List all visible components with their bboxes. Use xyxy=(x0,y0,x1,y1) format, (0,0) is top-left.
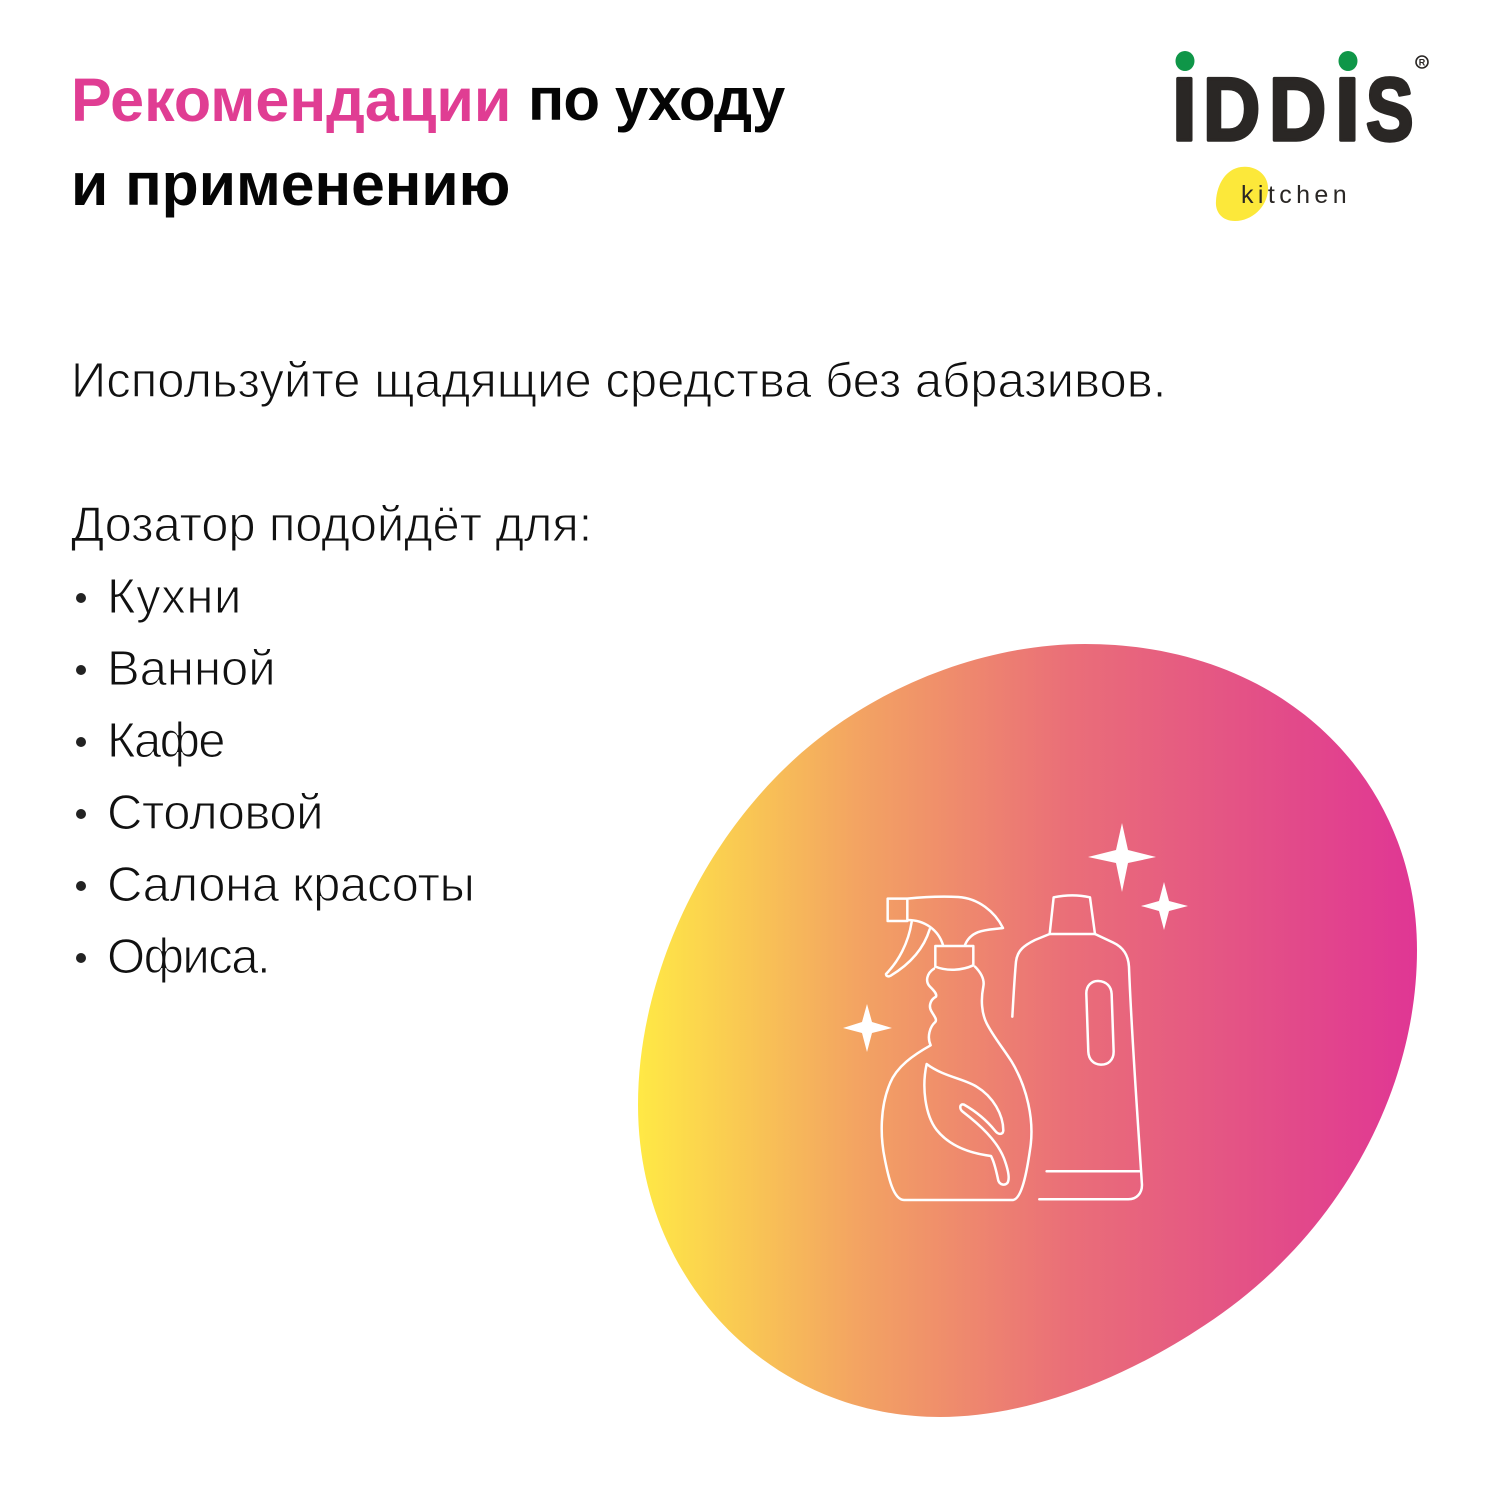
logo: iddis kitchen: D xyxy=(1203,60,1260,159)
list of places: Кафе xyxy=(107,714,224,768)
list of places xyxy=(76,570,474,984)
spray bottle body xyxy=(882,946,1031,1200)
list of places: Офиса. xyxy=(107,930,269,984)
spray trigger head xyxy=(888,897,1003,945)
icon: sparkles xyxy=(843,823,1188,1052)
bottle label xyxy=(1086,981,1114,1065)
suitability heading: Дозатор подойдёт для: xyxy=(71,498,592,552)
list of places: Кухни xyxy=(107,570,242,624)
logo: iddis kitchen xyxy=(1172,51,1429,221)
trigger xyxy=(886,922,930,976)
icon: spray bottle and detergent bottle xyxy=(882,895,1142,1200)
leaf xyxy=(924,1064,1009,1185)
blob xyxy=(638,644,1417,1417)
detergent bottle body xyxy=(1012,934,1142,1199)
logo: iddis kitchen: S xyxy=(1366,60,1413,160)
list of places: Салона красоты xyxy=(107,858,474,912)
list of places: Столовой xyxy=(107,786,323,840)
logo: iddis kitchen: kitchen xyxy=(1241,181,1351,209)
title: и применению xyxy=(71,150,510,218)
list of places: Ванной xyxy=(107,642,276,696)
logo: iddis kitchen: D xyxy=(1269,60,1326,159)
logo: iddis kitchen: I xyxy=(1335,59,1360,159)
bottle cap xyxy=(1050,895,1095,934)
title: по уходу xyxy=(528,66,784,133)
title xyxy=(71,66,785,218)
logo: iddis kitchen: I xyxy=(1172,59,1197,159)
intro text: Используйте щадящие средства без абразивов. xyxy=(71,354,1166,408)
logo: iddis kitchen: R xyxy=(1419,58,1426,68)
title: Рекомендации xyxy=(71,66,511,134)
